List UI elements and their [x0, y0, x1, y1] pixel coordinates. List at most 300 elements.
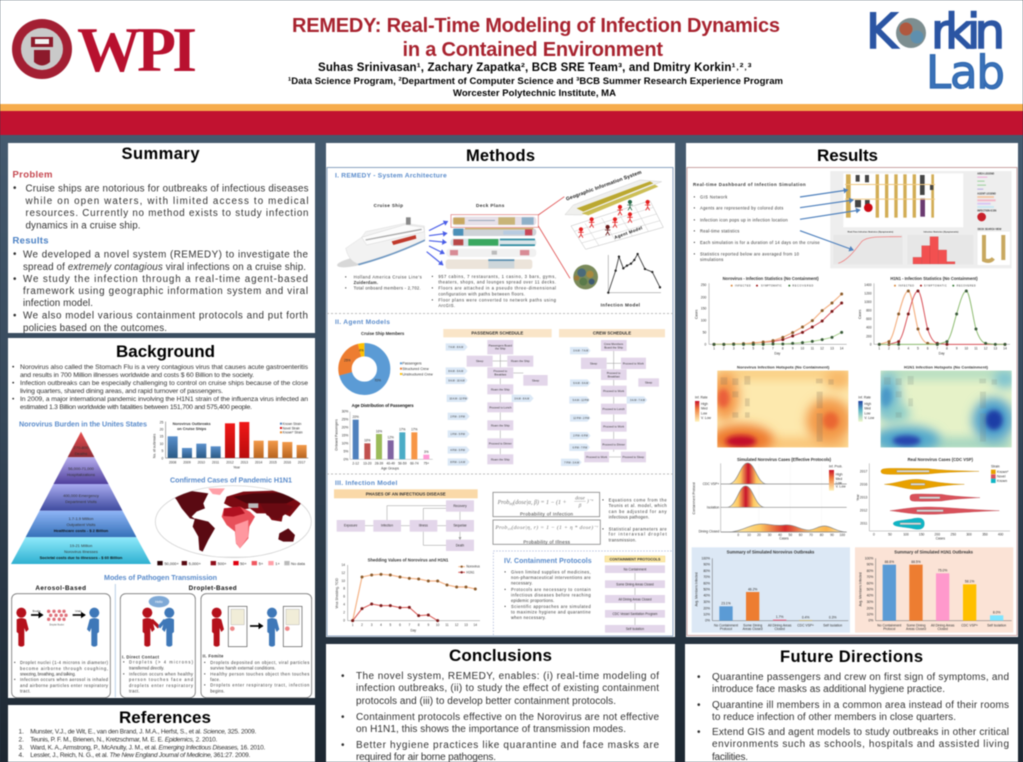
chart: norovirus outbreaks on cruise ships: Known* Strain — [283, 431, 303, 435]
chart: norovirus infection statistics: 9 — [792, 346, 794, 350]
chart: age distribution: Onboard Passengers — [334, 419, 338, 451]
flowchart: crew schedule: Proceed to Work — [623, 361, 644, 365]
chart: age distribution: 50-59 — [398, 462, 407, 466]
chart: norovirus outbreaks on cruise ships: 2009 — [183, 461, 191, 465]
text: direct contact: • — [123, 672, 125, 677]
chart: age distribution — [334, 403, 433, 470]
chart: norovirus heatmap: Low — [701, 411, 708, 415]
chart: summary of norovirus outbreaks: CDC VSP+ — [797, 623, 814, 627]
text: containment bullets: when necessary. — [511, 615, 546, 620]
diagram: transmission modes — [12, 584, 312, 698]
chart: summary of norovirus outbreaks: Avg. Members Infected — [695, 572, 699, 606]
chart: summary of norovirus outbreaks: 70% — [703, 575, 710, 579]
icon: aerosol transmission — [16, 608, 99, 647]
chart: norovirus infection statistics: Norovirus - Infection Statistics (No Containment) — [723, 276, 819, 281]
chart: shedding values: 10 — [341, 579, 345, 583]
text: ship facts: Zuiderdam. — [354, 280, 378, 285]
chart: age distribution: 25% — [342, 418, 348, 422]
text: future directions bullets: introduce face masks as additional hygiene practice. — [712, 684, 945, 695]
chart: simulated norovirus ridgeline: High — [836, 473, 843, 477]
chart: summary of H1N1 outbreaks: 30% — [867, 600, 873, 604]
diagram: phases of infectious disease: PHASES OF AN INFECTIOUS DISEASE — [366, 491, 446, 496]
chart: summary of norovirus outbreaks: 100% — [701, 556, 710, 560]
chart: age distribution: Age Distribution of Passengers — [352, 403, 414, 408]
chart: real norovirus violins: Cases — [936, 536, 945, 540]
chart: norovirus infection statistics: 3 — [733, 346, 735, 350]
chart: summary of norovirus outbreaks: 30% — [703, 600, 710, 604]
chart: age distribution: 13-20 — [363, 462, 372, 466]
chart: burden pyramid: Norovirus Illnesses — [64, 549, 98, 554]
chart: summary of norovirus outbreaks: Protocol — [720, 627, 732, 631]
text: fomite: II. Fomite — [203, 654, 224, 659]
text: future directions bullets: • — [697, 672, 701, 683]
diagram: phases of infectious disease: Illness — [419, 524, 428, 528]
text: equations notes: Teunis et al. model, which — [609, 503, 667, 508]
chart: norovirus infection statistics: SYMPTOMATIC — [761, 285, 782, 288]
flowchart: crew schedule: Sleep — [645, 380, 653, 384]
chart: shedding values: 1 — [352, 623, 354, 627]
equation: probability of illness: ill — [508, 527, 511, 531]
flowchart: crew schedule: Sleep — [590, 361, 598, 365]
chart: H1N1 infection statistics: 1200 — [864, 291, 872, 295]
chart: shedding values: 3 — [371, 623, 373, 627]
section: dashboard — [693, 171, 1012, 268]
chart: age distribution: 75+ — [423, 462, 429, 466]
text: fomite: • — [204, 660, 206, 665]
logo: Korkin Lab — [866, 4, 1005, 99]
text: problem — [13, 183, 309, 232]
chart: summary of norovirus outbreaks: 10% — [703, 613, 710, 617]
equation: probability of infection: )⁻ᵅ — [586, 497, 594, 504]
text: references list — [18, 728, 265, 759]
chart: norovirus infection statistics: 13 — [830, 346, 834, 350]
flowchart: crew schedule: 9 A.M - 12 P.M — [573, 399, 589, 402]
flowchart: crew schedule — [559, 329, 665, 466]
chart: real norovirus violins: 200 — [935, 532, 940, 536]
text: dashboard notes: Real-time statistics — [700, 228, 739, 233]
flowchart: crew schedule: Proceed to Work — [603, 425, 625, 429]
chart: burden pyramid: Deaths — [75, 451, 87, 456]
diagram: agent model: Agent Model — [614, 225, 643, 240]
text: references list: 4. — [18, 752, 24, 759]
text: dashboard notes: Agents are represented by colored dots — [700, 206, 783, 211]
chart: shedding values: 6 — [399, 623, 401, 627]
text: aerosol: and airborne particles enter respiratory — [20, 683, 109, 688]
chart: norovirus infection statistics: 8 — [782, 346, 784, 350]
flowchart: passenger schedule: Sleep — [476, 359, 484, 363]
text: containment bullets: epidemic proportions. — [511, 598, 554, 603]
text: dashboard notes: • — [694, 228, 696, 233]
section: statistics and heatmaps — [695, 276, 1016, 454]
chart: shedding values: 6 — [343, 595, 345, 599]
text: fomite: Droplets deposited on object, viral particles — [210, 660, 309, 665]
text: aerosol: Droplet nuclei (1-4 microns in diameter) — [20, 660, 109, 665]
text: equations notes — [602, 498, 668, 542]
chart: simulated norovirus ridgeline: Cases — [779, 536, 789, 540]
chart: summary of H1N1 outbreaks — [855, 547, 1013, 633]
chart: H1N1 infection statistics: 2 — [888, 346, 890, 350]
flowchart: passenger schedule: Roam the Ship — [491, 457, 510, 461]
chart: H1N1 infection statistics: 11 — [974, 346, 978, 350]
chart: real norovirus violins: Known — [997, 479, 1007, 483]
chart: norovirus outbreaks on cruise ships — [153, 420, 308, 470]
heading: summary: Summary — [122, 145, 200, 163]
text: ship facts: • — [345, 285, 347, 290]
chart: H1N1 infection statistics: 0 — [870, 343, 872, 347]
chart: real norovirus violins: 150 — [919, 532, 925, 536]
text: direct contact — [122, 654, 194, 694]
flowchart: containment protocols: No Containment — [624, 567, 646, 571]
text: aerosol: sneezing, breathing, and talking. — [20, 672, 76, 677]
text: direct contact: tract. — [129, 689, 140, 694]
chart: burden pyramid — [11, 432, 151, 564]
text: dashboard notes: • — [694, 194, 696, 199]
text: dashboard notes: GIS Network — [700, 194, 728, 199]
text: containment bullets: Given limited supplies of medicines, — [511, 570, 591, 575]
icon: direct contact: Hello — [155, 600, 163, 604]
image: simulation dashboard: DECK SEARCH VIEW — [978, 228, 1002, 231]
text: problem: resources. Currently no method exists to study infection — [26, 208, 309, 219]
section: agent models — [334, 319, 665, 470]
legend: H1N1 map: 50,000+ — [164, 561, 180, 566]
chart: norovirus outbreaks on cruise ships: 20 — [160, 428, 163, 432]
heading: references: References — [119, 708, 211, 727]
chart: norovirus infection statistics: 0 — [704, 343, 706, 347]
panel: results — [686, 143, 1018, 637]
chart: burden pyramid: Hospitalizations — [67, 472, 95, 477]
chart: real norovirus violins: 250 — [951, 532, 956, 536]
chart: age distribution: 28-39 — [375, 462, 383, 466]
text: background bullets: living quarters, shared dining areas, and rapid turnover of passengers. — [20, 388, 223, 395]
legend: H1N1 map: No data — [291, 561, 306, 566]
chart: cruise ship members donut: Structured Crew — [402, 367, 429, 371]
text: conclusions bullets — [341, 671, 659, 762]
chart: cruise ship members donut — [341, 331, 433, 393]
section: system architecture: I. REMEDY - System Architecture — [335, 173, 447, 180]
chart: real norovirus violins: 400 — [998, 532, 1004, 536]
chart: norovirus infection statistics: 50 — [703, 330, 706, 334]
text: fomite: survive harsh external conditions. — [210, 666, 276, 671]
text: references list: 2. — [18, 736, 24, 744]
chart: simulated norovirus ridgeline: 60 — [799, 533, 803, 537]
chart: simulated norovirus ridgeline: 80 — [820, 533, 824, 537]
text: direct contact: Infection occurs when healthy — [129, 672, 194, 677]
chart: H1N1 infection statistics: 8 — [946, 346, 948, 350]
chart: H1N1 infection statistics: INFECTED — [898, 285, 914, 288]
text: direct contact: droplets enter respiratory — [129, 683, 194, 688]
chart: cruise ship members donut: 25% — [344, 358, 351, 362]
chart: norovirus infection statistics: 250 — [701, 283, 706, 287]
legend: H1N1 map: 1+ — [275, 561, 281, 566]
chart: simulated norovirus ridgeline: 30 — [768, 533, 772, 537]
text: deck facts: Floors are attached in a pseudo three-dimensional — [438, 286, 556, 291]
chart: summary of norovirus outbreaks: All Dining Areas — [768, 623, 792, 627]
chart: norovirus infection statistics: Cases — [695, 309, 699, 319]
logo: WPI wordmark: WPI — [77, 14, 197, 85]
chart: H1N1 infection statistics — [858, 276, 1010, 356]
text: equations notes: for interavsal droplet — [609, 532, 667, 537]
chart: H1N1 infection statistics: 7 — [936, 346, 938, 350]
chart: shedding values: 8 — [418, 623, 420, 627]
text: containment bullets: • — [504, 587, 506, 592]
chart: shedding values: 13 — [464, 623, 468, 627]
flowchart: passenger schedule: Passengers Board — [489, 343, 512, 347]
chart: summary of H1N1 outbreaks: CDC VSP+ — [961, 623, 978, 627]
chart: summary of norovirus outbreaks: 40% — [703, 594, 710, 598]
heading: conclusions: Conclusions — [449, 646, 552, 665]
chart: shedding values: 12 — [341, 571, 345, 575]
chart: real norovirus violins: Real Norovirus Cases (CDC VSP) — [908, 457, 974, 462]
chart: norovirus outbreaks on cruise ships: 2008 — [169, 461, 176, 465]
chart: real norovirus violins: Year — [856, 493, 860, 501]
chart: summary of norovirus outbreaks: 46.2% — [748, 587, 757, 591]
flowchart: containment protocols: CDC Vessel Sanitation Program — [613, 612, 658, 616]
chart: summary of norovirus outbreaks: 23.1% — [721, 602, 731, 606]
text: references list: 3. — [18, 744, 24, 752]
chart: norovirus outbreaks on cruise ships: 2014 — [255, 461, 262, 465]
text: containment bullets: • — [504, 570, 506, 575]
chart: shedding values: 4 — [343, 603, 345, 607]
flowchart: passenger schedule: Proceed to Dinner — [489, 441, 512, 445]
text: aerosol: tract. — [20, 689, 31, 694]
text: results: We developed a novel system (REMEDY) to investigate the — [23, 250, 309, 260]
flowchart: passenger schedule: 2 P.M - 3 P.M — [450, 415, 465, 418]
text: references list: Munster, V.J., de Wit, E., van den Brand, J. M.A., Herfst, S., et al. Science, 325. 2009. — [30, 728, 256, 736]
text: equations notes: • — [602, 498, 604, 503]
text: future directions bullets: environments such as schools, hospitals and assisted living — [712, 739, 1009, 750]
chart: real norovirus violins: 350 — [982, 532, 988, 536]
text: fomite: face. — [210, 677, 220, 682]
chart: age distribution: 17% — [399, 428, 406, 432]
chart: H1N1 infection statistics: 10 — [964, 346, 968, 350]
chart: real norovirus violins: 100 — [903, 532, 909, 536]
chart: age distribution: 17% — [411, 428, 418, 432]
equation: probability of infection: Prob — [498, 500, 509, 506]
text: fomite: • — [204, 682, 206, 687]
subheading: results: Results — [12, 236, 48, 246]
chart: age distribution: 20% — [352, 415, 359, 419]
legend: H1N1 map: 5+ — [259, 561, 264, 566]
chart: real norovirus violins: Strain — [991, 464, 1000, 468]
chart: norovirus heatmap: High — [701, 402, 708, 406]
chart: simulated norovirus ridgeline: Containment Protocol — [692, 482, 696, 514]
legend: H1N1 map — [157, 561, 306, 566]
chart: H1N1 heatmap: Inf. Rate — [858, 395, 871, 399]
text: deck facts: • — [432, 286, 434, 291]
text: conclusions bullets: protocols and (iii) to develop better containment protocols. — [356, 696, 616, 707]
chart: age distribution: 40-49 — [386, 462, 395, 466]
chart: norovirus heatmap: Inf. Rate — [695, 395, 708, 399]
chart: summary of H1N1 outbreaks: 100% — [865, 556, 873, 560]
text: results: We also model various containment protocols and put forth — [23, 310, 308, 322]
text: equations notes: Equations come from the — [609, 498, 667, 503]
text: deck facts: • — [432, 274, 434, 279]
chart: H1N1 infection statistics: 600 — [866, 317, 872, 321]
chart: cruise ship members donut: Cruise Ship Members — [361, 331, 405, 336]
equation: probability of infection: Probability of Infection — [520, 511, 573, 516]
text: conclusions bullets: • — [341, 740, 345, 751]
chart: H1N1 infection statistics: RECOVERED — [957, 285, 976, 288]
text: future directions bullets: Extend GIS and agent models to study outbreaks in other critical — [712, 727, 1009, 738]
text: containment bullets: Protocols are necessary to contain — [511, 587, 591, 592]
logo: Korkin Lab: rkin — [931, 4, 1005, 60]
chart: age distribution: 15% — [342, 434, 348, 438]
chart: summary of H1N1 outbreaks: 88.6% — [885, 560, 894, 564]
text: equations notes: transmission. — [609, 537, 636, 542]
flowchart: passenger schedule: 8 A.M - 9 A.M — [448, 370, 463, 373]
chart: norovirus heatmap — [695, 365, 852, 454]
chart: burden pyramid: Societal costs due to illnesses - $ 60 Billion — [40, 555, 123, 560]
flowchart: passenger schedule — [443, 329, 552, 466]
text: results: spread of extremely contagious viral infections on a cruise ship. — [23, 262, 306, 273]
chart: real norovirus violins: 2011 — [860, 522, 867, 526]
title: REMEDY: Real-Time Modeling of Infection Dynamics — [292, 15, 780, 37]
flowchart: passenger schedule: 1 P.M - 5 P.M — [450, 433, 465, 436]
chart: shedding values: Virus Shedding, TCID — [335, 577, 339, 609]
flowchart: crew schedule: 6 P.M - 7 P.M — [573, 446, 587, 449]
flowchart: crew schedule: 3 A.M - 7 A.M — [630, 399, 645, 402]
chart: real norovirus violins: 2016 — [860, 482, 867, 486]
diagram: phases of infectious disease: Death — [456, 543, 464, 547]
icon: fomite — [212, 606, 302, 647]
chart: burden pyramid: Healthcare costs - $ 2 Billion — [54, 528, 109, 533]
section: system architecture: Cruise Ship — [374, 203, 403, 208]
title: in a Contained Environment — [402, 39, 663, 61]
chart: summary of norovirus outbreaks: 20% — [703, 606, 710, 610]
chart: H1N1 heatmap: V. Low — [864, 416, 875, 420]
chart: shedding values: 8 — [343, 587, 345, 591]
text: deck facts: Floor plans were converted to network paths using — [438, 297, 557, 302]
flowchart: passenger schedule: 10 A.M - 12 P.M — [449, 397, 467, 400]
text: results: infection model. — [23, 298, 93, 309]
chart: norovirus infection statistics: 14 — [840, 346, 844, 350]
chart: age distribution: 60-74 — [410, 462, 419, 466]
chart: summary of norovirus outbreaks: 1.7% — [776, 615, 783, 619]
icon: aerosol transmission: Breathe — [33, 610, 41, 613]
chart: summary of H1N1 outbreaks: Closed — [937, 627, 948, 631]
text: containment bullets: infectious diseases before reaching — [511, 592, 591, 597]
chart: real norovirus violins: 0 — [873, 532, 875, 536]
chart: summary of norovirus outbreaks: Areas Closed — [743, 627, 763, 631]
text: deck facts: ArcGIS. — [438, 303, 455, 308]
text: direct contact: person touches face and — [129, 677, 194, 682]
chart: real norovirus violins: 2012 — [860, 509, 867, 513]
chart: shedding values: Shedding Values of Norovirus and H1N1 — [368, 557, 449, 562]
chart: age distribution: 30% — [342, 410, 348, 414]
flowchart: containment protocols — [605, 556, 665, 633]
chart: real norovirus violins — [856, 457, 1010, 540]
equation: probability of infection: dose — [575, 495, 585, 501]
diagram: phases of infectious disease — [334, 489, 478, 551]
text: containment bullets — [504, 570, 591, 620]
equation: probability of infection — [493, 492, 600, 517]
chart: shedding values: Day — [411, 629, 417, 633]
flowchart: passenger schedule: Proceed to — [493, 369, 508, 373]
chart: H1N1 infection statistics: 6 — [927, 346, 929, 350]
chart: norovirus infection statistics: 1 — [713, 346, 715, 350]
chart: norovirus infection statistics: 200 — [701, 295, 706, 299]
text: results: We study the infection through a real-time agent-based — [23, 274, 308, 285]
chart: simulated norovirus ridgeline: Isolation — [707, 505, 719, 509]
equation: probability of illness: (dose|η, r) = 1 − (1 + η * dose)⁻ʳ — [511, 524, 599, 531]
chart: age distribution: 16% — [376, 429, 382, 433]
chart: H1N1 infection statistics: 1400 — [864, 283, 872, 287]
chart: norovirus outbreaks on cruise ships: No. of outbreaks — [153, 433, 157, 458]
affiliations — [288, 76, 783, 99]
title — [292, 15, 780, 61]
chart: age distribution: 10% — [342, 442, 348, 446]
chart: simulated norovirus ridgeline: 40 — [778, 533, 782, 537]
text: fomite: Healthy person touches object then touches — [210, 672, 309, 677]
text: direct contact: • — [123, 660, 125, 665]
image: simulation dashboard: Infection Statistics (Symptomatic) — [924, 231, 959, 234]
chart: norovirus outbreaks on cruise ships: 2011 — [212, 461, 219, 465]
connectors: red lines — [538, 197, 570, 278]
text: future directions bullets: • — [697, 727, 701, 738]
image: simulation dashboard: AREA LEGEND — [977, 172, 994, 175]
chart: age distribution: 5% — [344, 450, 348, 454]
legend: H1N1 map: 500+ — [218, 561, 227, 566]
section: infection model — [334, 480, 672, 635]
flowchart: passenger schedule: Roam the Ship — [511, 359, 530, 363]
chart: summary of H1N1 outbreaks: Self Isolation — [987, 623, 1006, 627]
chart: norovirus heatmap: V. Low — [701, 416, 711, 420]
chart: summary of H1N1 outbreaks: Summary of Simulated H1N1 Outbreaks — [894, 549, 974, 554]
text: deck facts: • — [432, 297, 434, 302]
chart: norovirus infection statistics: 4 — [742, 346, 744, 350]
chart: H1N1 infection statistics: 800 — [866, 308, 872, 312]
text: background bullets: • — [12, 380, 15, 387]
text: background bullets: In 2009, a major international pandemic involving the H1N1 strain of the influenza virus infected an — [20, 396, 308, 403]
panel: references — [8, 705, 315, 762]
chart: norovirus heatmap: Norovirus Infection Hotspots (No Containment) — [737, 365, 830, 370]
text: direct contact: Droplets (> 4 microns) — [129, 660, 194, 665]
chart: summary of H1N1 outbreaks: 50% — [867, 588, 873, 592]
text: background bullets: Norovirus also called the Stomach Flu is a very contagious virus that causes acute gastroenteritis — [20, 364, 309, 371]
chart: H1N1 infection statistics: 12 — [984, 346, 988, 350]
text: dashboard notes: Infection icon pops up in infection location — [700, 217, 788, 222]
chart: norovirus outbreaks on cruise ships: Year — [233, 466, 241, 470]
flowchart: crew schedule: 7 P.M - 3 A.M — [564, 461, 579, 464]
chart: norovirus infection statistics: 10 — [800, 346, 804, 350]
panel: conclusions — [326, 644, 675, 762]
text: conclusions bullets: infection outbreaks, (ii) to study the effect of existing containment — [356, 683, 659, 694]
chart: shedding values: Norovirus — [466, 565, 480, 569]
section: containment protocols: IV. Containment Protocols — [504, 558, 592, 565]
chart: shedding values: 10 — [436, 623, 440, 627]
chart: H1N1 heatmap: High — [864, 402, 871, 406]
chart: H1N1 infection statistics: Day — [939, 352, 945, 356]
chart: real norovirus violins: 2017 — [860, 469, 867, 473]
chart: age distribution: 0% — [344, 458, 348, 462]
chart: norovirus outbreaks on cruise ships: 2013 — [241, 461, 248, 465]
text: conclusions bullets: Containment protocols effective on the Norovirus are not effective — [356, 712, 659, 723]
text: references list: Teunis, P. F. M., Brienen, N., Kretzschmar, M. E. E. Epidemics, 2. 2010. — [30, 736, 217, 744]
chart: summary of H1N1 outbreaks: 20% — [867, 606, 873, 610]
chart: burden pyramid: Outpatient Visits — [66, 522, 96, 527]
heading: modes of transmission: Modes of Pathogen Transmission — [104, 573, 217, 582]
diagram: transmission modes: Droplet-Based — [189, 585, 237, 592]
text: direct contact: I. Direct Contact — [122, 654, 160, 659]
chart: H1N1 infection statistics: 5 — [917, 346, 919, 350]
arrows: ship to decks — [427, 221, 448, 265]
text: results: • — [13, 249, 17, 260]
diagram: agent model — [571, 200, 663, 249]
chart: norovirus outbreaks on cruise ships: 10 — [160, 442, 163, 446]
chart: real norovirus violins: Known* — [997, 470, 1009, 474]
chart: norovirus outbreaks on cruise ships: 15 — [160, 435, 163, 439]
heading: confirmed cases: Confirmed Cases of Pandemic H1N1 — [170, 476, 292, 484]
